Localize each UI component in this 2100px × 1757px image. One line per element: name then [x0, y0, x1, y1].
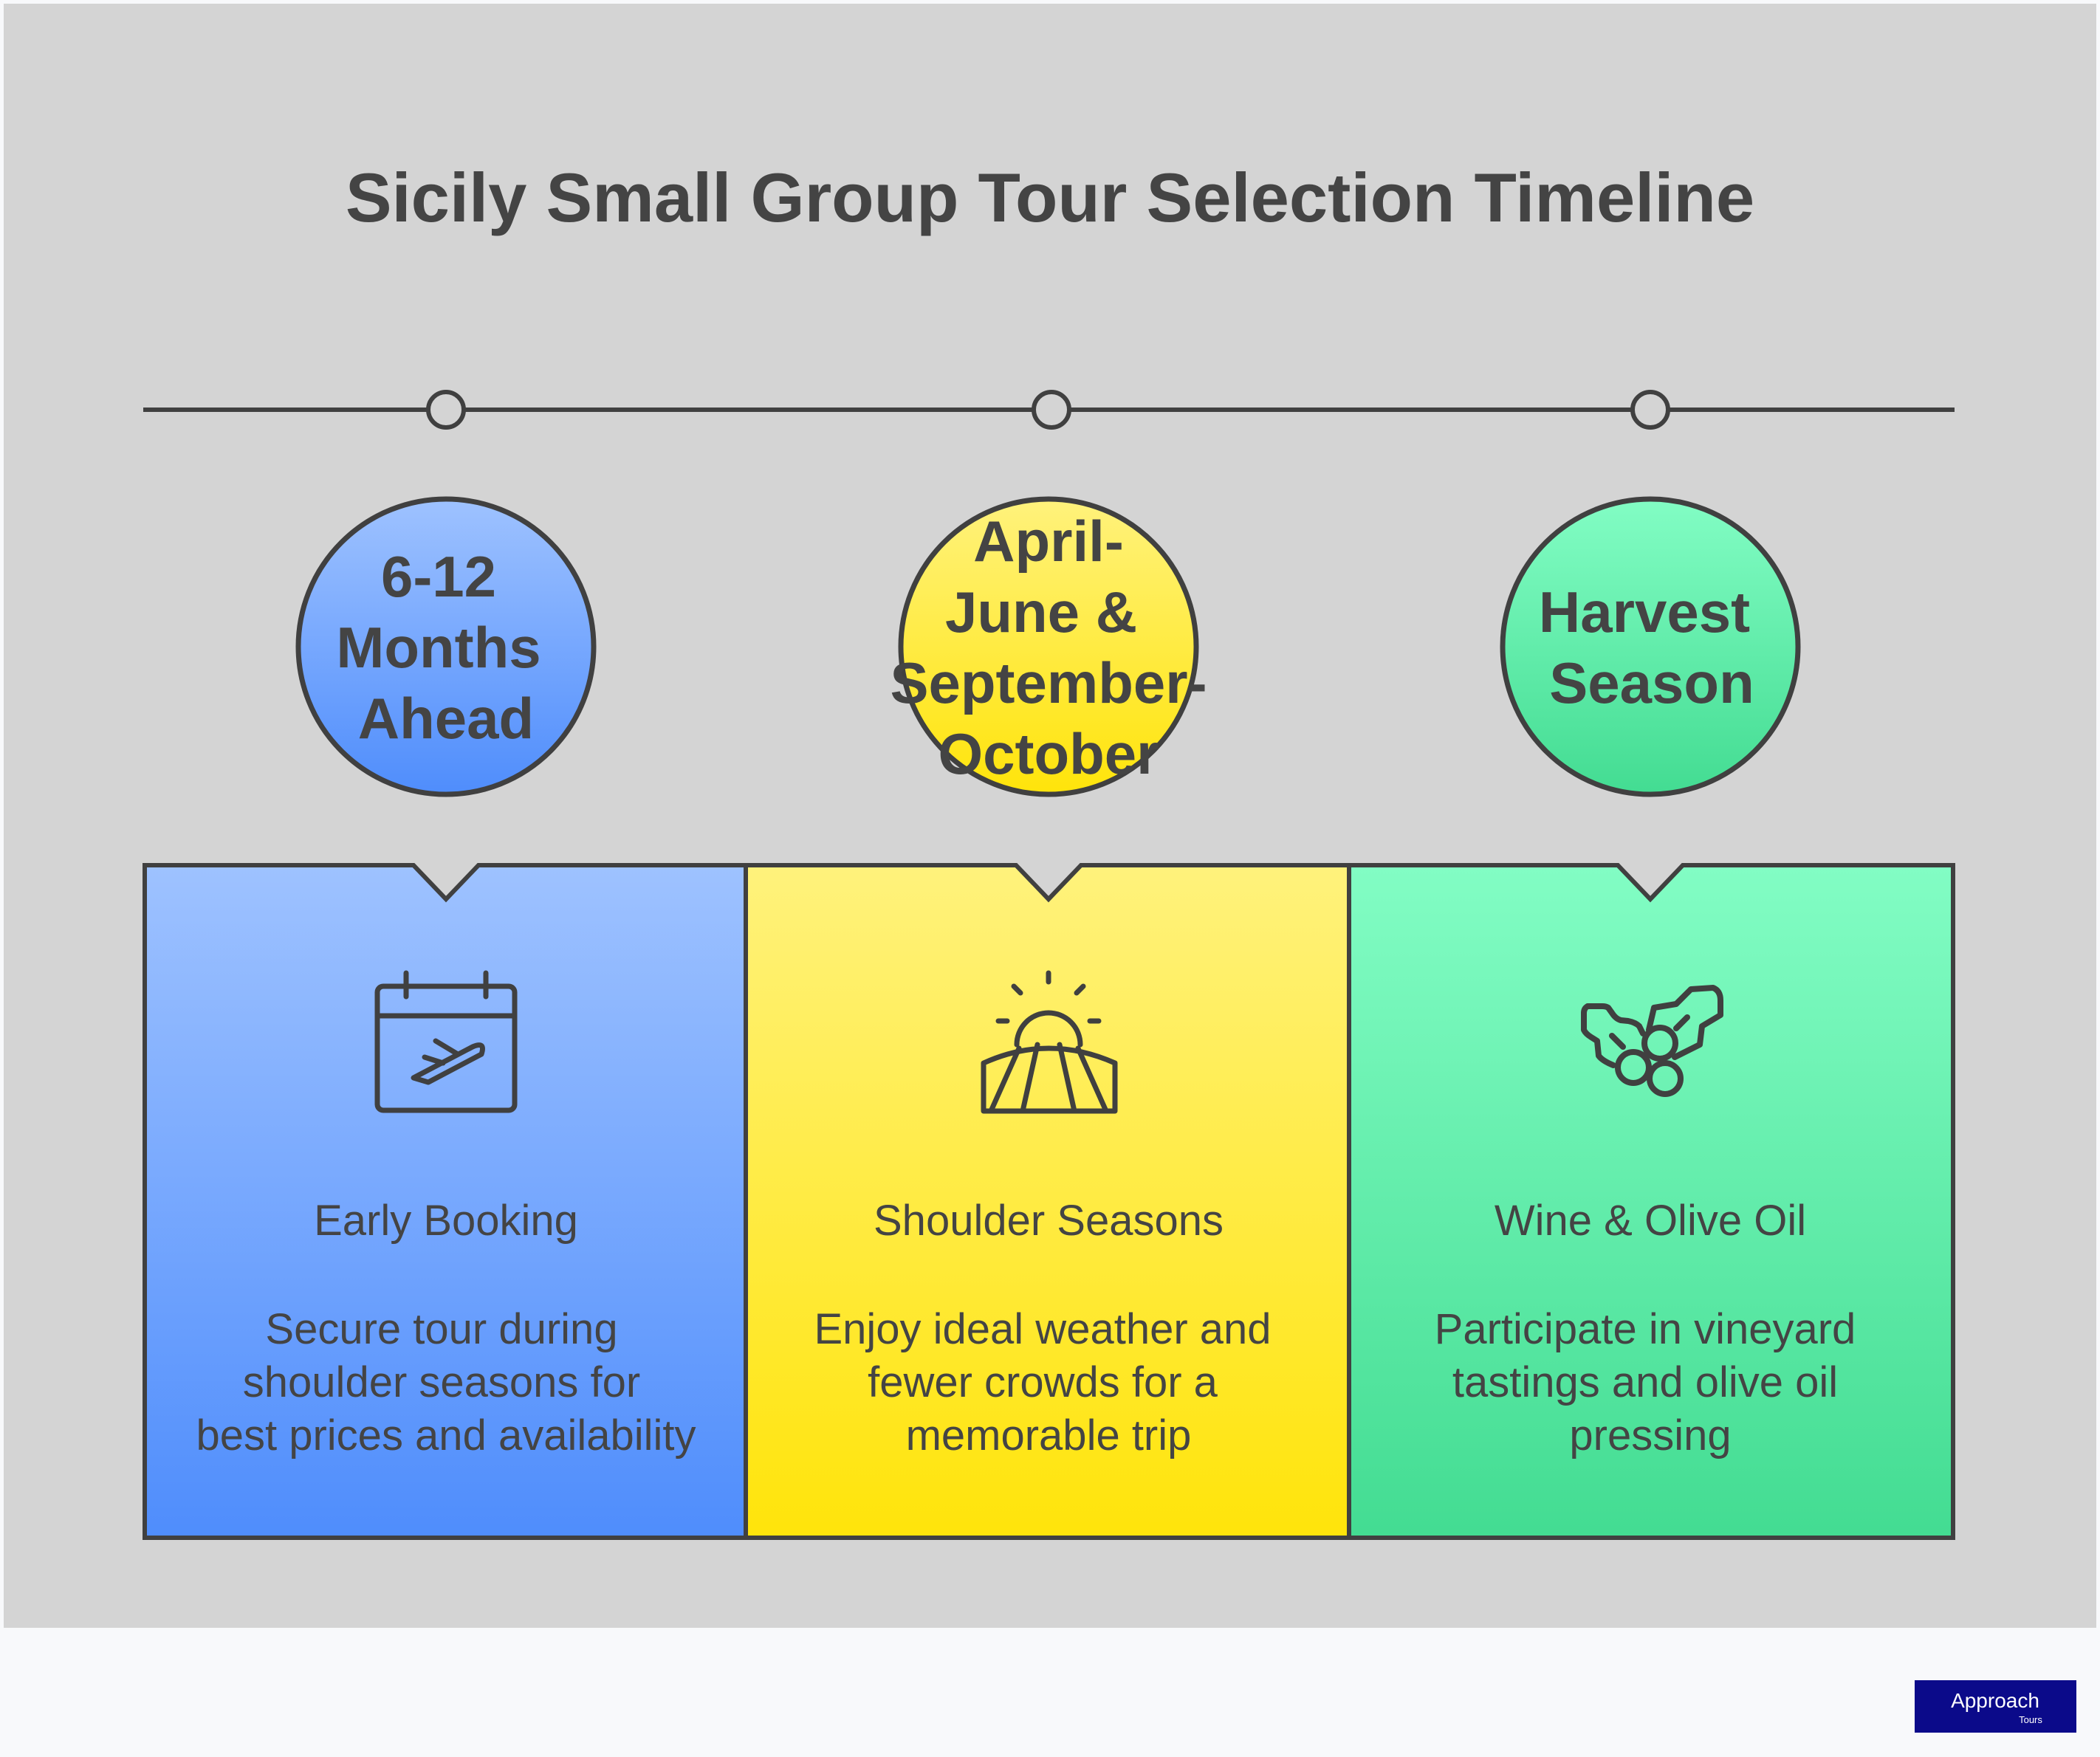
- circle: 6-12 months ahead: Ahead: [358, 686, 534, 751]
- circle: April-June & September-October: April-: [973, 509, 1124, 574]
- panel: early booking: Secure tour during: [265, 1305, 618, 1353]
- panel: shoulder seasons: Enjoy ideal weather and: [814, 1305, 1272, 1353]
- circle: 6-12 months ahead: 6-12: [381, 544, 496, 609]
- circle: 6-12 months ahead: [298, 499, 594, 794]
- circle: Harvest Season: [1503, 499, 1798, 794]
- icon: holly berries: [1584, 988, 1720, 1094]
- panel: wine & olive oil: tastings and olive oil: [1452, 1358, 1838, 1406]
- panel: shoulder seasons: Shoulder Seasons: [874, 1197, 1224, 1245]
- circle: April-June & September-October: June &: [945, 580, 1137, 644]
- panel: shoulder seasons: fewer crowds for a: [868, 1358, 1218, 1406]
- panel: early booking: shoulder seasons for: [243, 1358, 640, 1406]
- panel: early booking: [145, 865, 746, 1538]
- circle: Harvest Season: Harvest: [1539, 580, 1750, 644]
- logo: Approach Tours: Tours: [2019, 1714, 2042, 1725]
- timeline: [143, 392, 1955, 427]
- icon: sunrise over field: [984, 973, 1115, 1111]
- logo: Approach Tours: [1915, 1680, 2076, 1733]
- panel: wine & olive oil: Wine & Olive Oil: [1495, 1197, 1806, 1245]
- panel: wine & olive oil: Participate in vineyard: [1435, 1305, 1856, 1353]
- panel: shoulder seasons: [746, 865, 1349, 1538]
- panel: early booking: Early Booking: [314, 1197, 578, 1245]
- circle: Harvest Season: Season: [1549, 650, 1754, 715]
- panel: early booking: best prices and availability: [196, 1412, 696, 1459]
- panel: wine & olive oil: pressing: [1569, 1412, 1732, 1459]
- circle: April-June & September-October: [890, 499, 1207, 794]
- circle: April-June & September-October: October: [938, 721, 1159, 786]
- circle: 6-12 months ahead: Months: [336, 615, 541, 680]
- logo: Approach Tours: Approach: [1951, 1689, 2039, 1712]
- title: Sicily Small Group Tour Selection Timeline: [346, 159, 1754, 236]
- panel: shoulder seasons: memorable trip: [906, 1412, 1191, 1459]
- circle: April-June & September-October: September-: [890, 650, 1207, 715]
- icon: calendar plane: [377, 973, 515, 1110]
- panel: wine & olive oil: [1349, 865, 1953, 1538]
